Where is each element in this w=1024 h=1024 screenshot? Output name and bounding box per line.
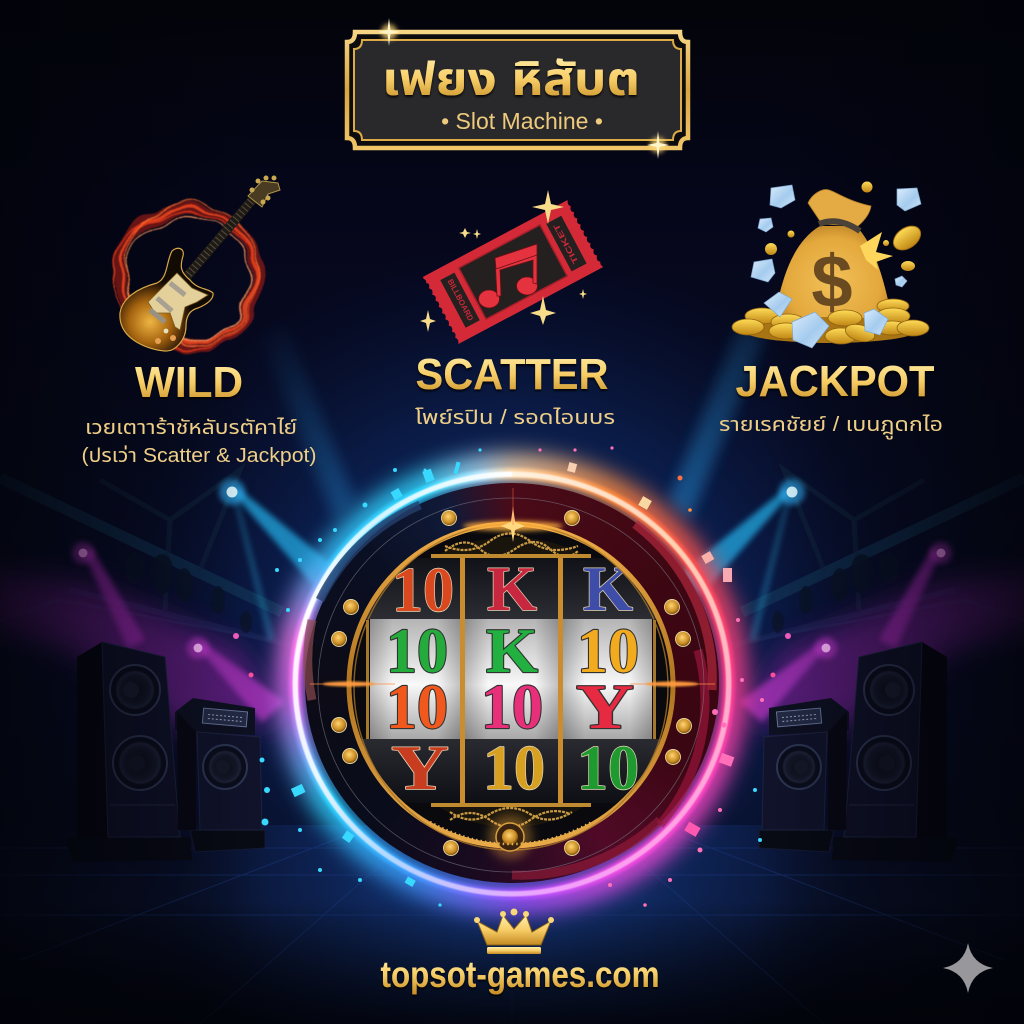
jackpot heading: JACKPOT [736,357,935,406]
reel symbols: Y [391,732,449,803]
wild description line 2: (ปรเว่า Scatter & Jackpot) [82,444,316,467]
icon: fire ring [109,199,257,351]
website url: topsot-games.com [380,954,660,995]
gold flares [310,488,715,686]
reel symbols: K [583,553,633,624]
bottom jewel [430,815,592,859]
reel symbols: Y [576,671,634,742]
icon: electric guitar [120,176,280,351]
reel symbols: 10 [386,671,448,742]
icon: grey four point star [943,943,993,993]
icon: diamonds [751,185,921,348]
gold ring [349,524,673,846]
crown [474,908,554,954]
jackpot panel [719,182,943,440]
left stage: truss, lights and speakers [0,325,355,862]
top ornament [431,534,591,558]
scatter description: โพย์รปิน / รอดไอนบร [415,407,615,429]
wild heading: WILD [135,358,243,407]
reel symbols: K [487,553,537,624]
jackpot description: รายเรคชัยย์ / เบนฎูดกไอ [719,414,943,440]
icon: sparkles [420,190,587,332]
reel symbols [390,568,638,790]
reel separators [460,556,563,804]
slot machine [308,488,715,875]
banner frame [347,32,688,148]
icon: money bag [765,182,925,328]
banner sparkle top [378,18,400,46]
banner subtitle: • Slot Machine • [441,108,603,134]
ring particles [260,446,764,907]
reel symbols: K [486,615,538,686]
wild description line 1: เวยเตาาร้าชัหลับรตัคาไย์ [85,416,297,439]
inner hairline ring [318,498,704,872]
icon: ticket: BILLBOARD [446,278,475,323]
scatter panel [415,190,615,429]
banner sparkle bottom [647,131,669,159]
right stage: truss, lights and speakers [669,325,1024,862]
icon: ticket [421,197,606,349]
reel symbols: 10 [386,615,448,686]
banner inner plate [354,40,681,140]
reel symbols: 10 [577,615,639,686]
reel symbols: 10 [577,732,639,803]
rim bands [308,505,712,875]
reels [350,553,670,804]
icon: money bag: $ [811,240,853,323]
neon ring colored band [287,466,737,902]
slot disc [305,483,719,883]
reel symbols: 10 [481,671,543,742]
banner title: เฟยง หิสับต [382,53,640,105]
reel window [349,524,673,846]
neon ring glow [260,436,765,929]
icon: coin pile [732,299,929,345]
gold ring outer line [354,524,668,850]
icon: ticket: TICKET [552,222,580,265]
right spotlight beam [669,325,766,520]
reel symbols: 10 [483,732,545,803]
wild panel [82,176,316,467]
title banner [347,18,688,159]
bottom ornament [431,803,591,828]
reel symbols: 10 [392,554,454,625]
neon ring white core [292,470,732,898]
gold studs [332,510,692,856]
scatter heading: SCATTER [416,350,608,399]
